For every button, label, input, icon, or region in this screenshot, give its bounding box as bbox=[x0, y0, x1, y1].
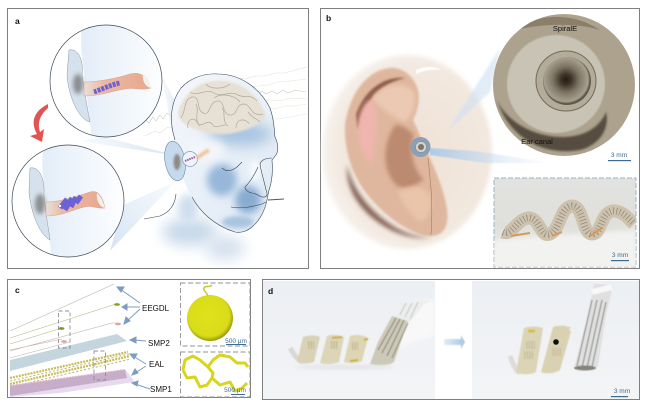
mouth cable bbox=[268, 199, 284, 200]
bottom zoom circle: expanded electrode bbox=[12, 144, 124, 258]
SMP2 layer bbox=[10, 334, 127, 371]
scale bar 3 mm inset: 3 mm bbox=[612, 252, 628, 259]
panel c: exploded layer diagram bbox=[8, 280, 250, 398]
layer labels: SMP2 bbox=[148, 339, 170, 348]
scale bar 3 mm d bbox=[611, 388, 630, 397]
layer labels: SMP1 bbox=[150, 385, 172, 394]
face shading bbox=[172, 74, 278, 232]
layer labels: EEGDL bbox=[142, 304, 170, 313]
panel label d: d bbox=[268, 286, 273, 296]
ear on head bbox=[164, 140, 186, 182]
panel b: ear photograph bbox=[320, 8, 640, 268]
panel d: spiral photographs bbox=[262, 280, 640, 400]
electrode pads bbox=[58, 303, 121, 343]
serpentine mesh inset bbox=[180, 352, 250, 397]
EAL mesh bbox=[10, 352, 131, 387]
scale bar 3 mm d: 3 mm bbox=[614, 388, 630, 395]
annotation arrows bbox=[117, 287, 150, 389]
black dot marker bbox=[553, 339, 559, 345]
brain bbox=[178, 81, 266, 134]
scale bar 3 mm upper: 3 mm bbox=[611, 152, 627, 159]
head outline bbox=[144, 74, 278, 232]
ear canal inset on head bbox=[182, 152, 198, 166]
earpiece ring bbox=[410, 137, 430, 157]
scale bar 3 mm upper bbox=[608, 152, 631, 161]
tiny orange canal end bbox=[197, 150, 209, 158]
panel a: brain-ear illustration bbox=[8, 8, 308, 268]
label SpiralE: SpiralE bbox=[553, 24, 577, 33]
top zoom circle: contracted electrode bbox=[50, 24, 162, 138]
zoom cones bbox=[162, 76, 181, 132]
serpentine mesh inset: 500 μm bbox=[224, 387, 246, 394]
head illustration bbox=[144, 70, 285, 260]
dashed selection boxes bbox=[58, 311, 106, 380]
round electrode inset bbox=[180, 283, 250, 346]
scale bar 3 mm inset bbox=[611, 252, 629, 261]
process arrow bbox=[444, 335, 465, 349]
SMP1 layer bbox=[10, 369, 135, 397]
brain wave signals bbox=[140, 67, 307, 136]
EEGDL traces bbox=[10, 284, 118, 358]
label Ear canal: Ear canal bbox=[521, 137, 553, 146]
panel label a: a bbox=[15, 16, 20, 26]
neck and shoulder shading bbox=[162, 194, 245, 260]
layer labels: EAL bbox=[149, 360, 165, 369]
round electrode inset: 500 μm bbox=[225, 338, 247, 345]
ear photo bbox=[322, 55, 492, 249]
curved red arrow bbox=[30, 104, 48, 142]
right photo bbox=[472, 281, 639, 399]
spiral electrode inset bbox=[494, 178, 636, 268]
panel label c: c bbox=[15, 285, 20, 295]
layer labels bbox=[142, 304, 172, 394]
canal photo circle bbox=[493, 14, 635, 156]
panel label b: b bbox=[326, 13, 331, 23]
zoom cones bbox=[446, 48, 500, 133]
left photo bbox=[263, 281, 435, 399]
